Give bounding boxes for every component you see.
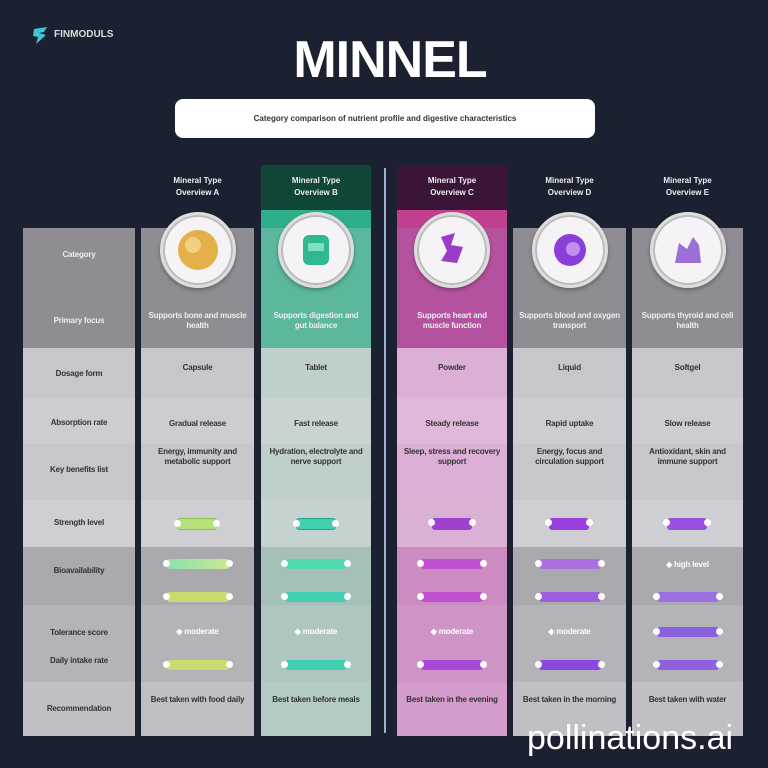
column 2 teal: Fast release [294, 419, 338, 428]
column 4: Supports blood and oxygen transport [519, 311, 620, 330]
column 3 pink: Steady release [425, 419, 479, 428]
column 3 pink: ◆ moderate [431, 627, 473, 636]
column 5: Mineral Type [663, 176, 712, 185]
icon: gold mineral [160, 212, 236, 288]
column 3 pink: Sleep, stress and recovery support [404, 447, 500, 466]
column 1: Capsule [183, 363, 212, 372]
column 5: Supports thyroid and cell health [642, 311, 733, 330]
column 2 teal: ◆ moderate [295, 627, 337, 636]
column 1: Overview A [176, 188, 219, 197]
column: labels: Dosage form [56, 369, 102, 378]
column 1: Supports bone and muscle health [149, 311, 246, 330]
column 5: Antioxidant, skin and immune support [649, 447, 726, 466]
watermark: pollinations.ai [527, 719, 733, 757]
column 2 teal: Best taken before meals [272, 695, 360, 704]
column: labels: Bioavailability [54, 566, 104, 575]
column 5: Slow release [664, 419, 711, 428]
column 5 [632, 165, 743, 736]
subtitle bar [175, 99, 595, 138]
icon: green mineral [278, 212, 354, 288]
column: labels: Absorption rate [51, 418, 107, 427]
logo: FINMODULS [54, 29, 113, 40]
column: labels [23, 228, 135, 736]
column 3 pink: Supports heart and muscle function [417, 311, 487, 330]
column 4: Rapid uptake [546, 419, 593, 428]
column 4: Overview D [548, 188, 591, 197]
divider [384, 168, 386, 733]
column 3 pink: Mineral Type [428, 176, 476, 185]
column 4: Best taken in the morning [523, 695, 616, 704]
column 1: Energy, immunity and metabolic support [158, 447, 237, 466]
icon: violet mineral [532, 212, 608, 288]
column: labels: Strength level [54, 518, 104, 527]
column 1: Best taken with food daily [151, 695, 244, 704]
column 2 teal: Mineral Type [292, 176, 340, 185]
title: MINNEL [293, 31, 487, 89]
column 2 teal: Overview B [294, 188, 338, 197]
column 1: Mineral Type [173, 176, 222, 185]
column 4: ◆ moderate [548, 627, 591, 636]
column 2 teal [261, 165, 371, 736]
column 3 pink: Powder [438, 363, 466, 372]
column 4: Energy, focus and circulation support [535, 447, 604, 466]
icon: purple mineral [414, 212, 490, 288]
column: labels: Key benefits list [50, 465, 108, 474]
subtitle bar: Category comparison of nutrient profile and digestive characteristics [254, 114, 516, 123]
column: labels: Daily intake rate [50, 656, 108, 665]
column 1 [141, 165, 254, 736]
column 5: Overview E [666, 188, 709, 197]
column 1: Gradual release [169, 419, 226, 428]
column: labels: Tolerance score [50, 628, 108, 637]
column 2 teal: Hydration, electrolyte and nerve support [269, 447, 363, 466]
column 5: ◆ high level [666, 560, 709, 569]
column 4 [513, 165, 626, 736]
column 5: Best taken with water [649, 695, 726, 704]
column 2 teal: Supports digestion and gut balance [274, 311, 358, 330]
column 3 pink: Overview C [430, 188, 474, 197]
logo [33, 27, 113, 44]
icon: lavender mineral [650, 212, 726, 288]
column: labels: Recommendation [47, 704, 111, 713]
column: labels: Category [62, 250, 96, 259]
column 3 pink: Best taken in the evening [406, 695, 498, 704]
column: labels: Primary focus [54, 316, 104, 325]
column 4: Mineral Type [545, 176, 594, 185]
column 2 teal: Tablet [305, 363, 327, 372]
column 1: ◆ moderate [176, 627, 219, 636]
column 3 pink [397, 165, 507, 736]
column 4: Liquid [558, 363, 581, 372]
column 5: Softgel [675, 363, 700, 372]
